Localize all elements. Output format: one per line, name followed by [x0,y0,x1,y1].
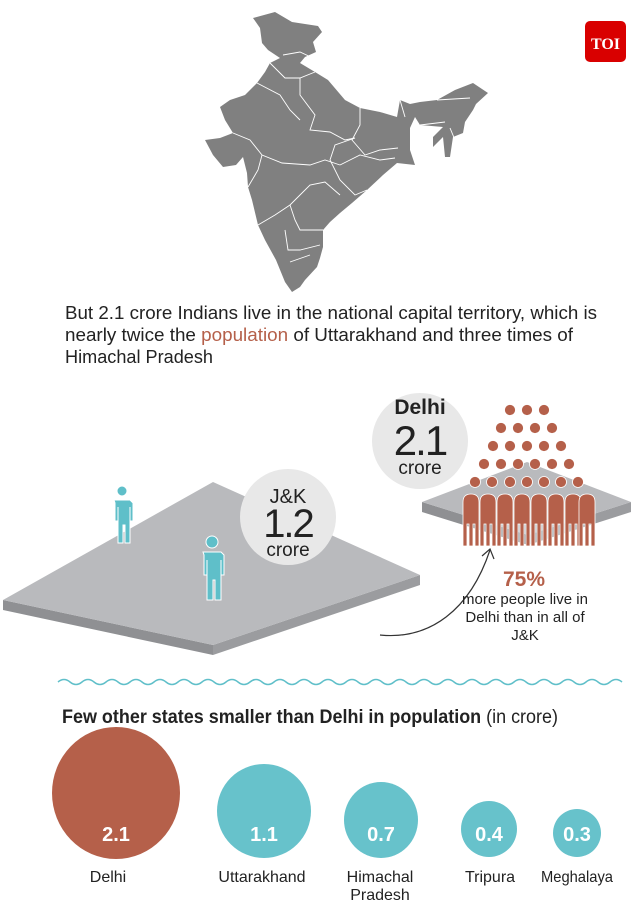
badge: Delhi 2.1 crore: Delhi [394,396,446,419]
bubble: Uttarakhand: Uttarakhand [218,869,306,886]
map: India [205,12,488,292]
callout: 75%: Delhi than in all of [465,609,585,626]
callout: 75%: J&K [511,627,539,644]
logo: TOI: TOI [591,36,620,53]
icon: person 2 [203,536,224,600]
bubble: Uttarakhand [217,764,311,886]
heading: few other states: Few other states smaller than Delhi in population (in crore) [62,707,558,728]
badge: Delhi 2.1 crore [372,393,468,489]
bubble: Tripura: 0.4 [475,824,504,846]
intro text [65,303,597,367]
intro text: But 2.1 crore Indians live in the national capital territory, which is [65,303,597,323]
bubble chart [52,727,613,904]
bubble: Meghalaya: Meghalaya [541,869,613,886]
icon: person 1 [114,486,133,543]
logo: TOI [585,21,626,62]
callout: 75% [462,568,588,644]
bubble: Tripura [461,801,517,886]
bubble: Himachal Pradesh [344,782,418,904]
intro text: Himachal Pradesh [65,347,213,367]
bubble: Uttarakhand: 1.1 [250,824,278,846]
bubble: Himachal Pradesh: 0.7 [367,824,395,846]
bubble: Meghalaya: 0.3 [563,824,591,846]
badge: Delhi 2.1 crore: 2.1 [394,417,447,464]
icon group: Delhi crowd [463,404,595,546]
arrow: J&K to Delhi [380,549,494,636]
badge: J&K 1.2 crore: J&K [270,486,307,508]
platform: J&K [3,482,420,655]
callout: 75%: 75% [503,568,545,591]
bubble: Delhi: Delhi [90,869,126,886]
platform: Delhi [422,462,631,545]
bubble: Delhi: 2.1 [102,824,130,846]
callout: 75%: more people live in [462,591,588,608]
bubble: Himachal Pradesh: Pradesh [350,887,410,904]
badge: J&K 1.2 crore [240,469,336,565]
badge: J&K 1.2 crore: crore [266,540,310,561]
intro text: nearly twice the population of Uttarakhand and three times of [65,325,574,345]
bubble: Tripura: Tripura [465,869,515,886]
bubble: Himachal Pradesh: Himachal [347,869,413,886]
bubble: Meghalaya [541,809,613,886]
badge: J&K 1.2 crore: 1.2 [263,502,314,546]
badge: Delhi 2.1 crore: crore [398,458,442,479]
bubble: Delhi [52,727,180,886]
